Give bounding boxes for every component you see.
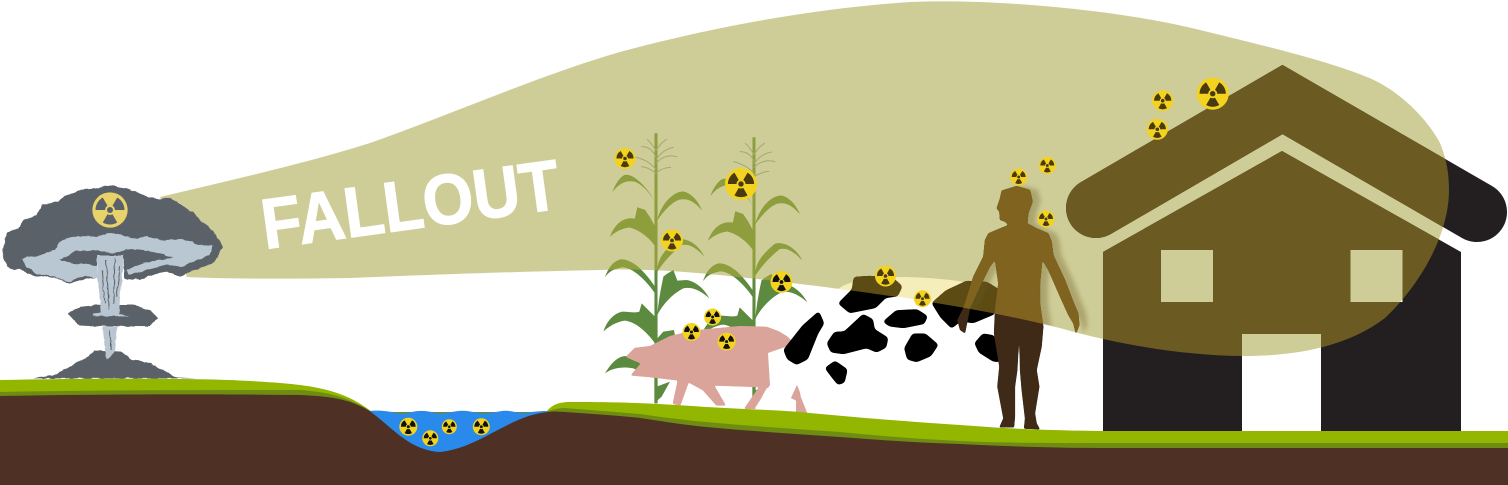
icon: radiation symbols in river <box>399 418 490 446</box>
corn upper portion inside plume <box>608 133 802 280</box>
corn lower portion <box>603 133 807 407</box>
icon: radiation symbol on cloud <box>92 192 128 228</box>
icon: radiation symbols on cow <box>875 266 931 307</box>
icon: radiation symbols on corn and pig <box>614 148 792 351</box>
house <box>1096 100 1477 431</box>
corn tassels <box>636 139 775 177</box>
grass shadow <box>0 390 1508 485</box>
house black base <box>1096 100 1477 431</box>
mushroom cloud <box>3 185 223 378</box>
house tinted by plume <box>1066 64 1449 356</box>
grass <box>0 379 1508 485</box>
soil <box>0 394 1508 485</box>
human silhouette <box>957 186 1079 429</box>
icon: radiation symbols on roof <box>1147 78 1229 140</box>
icon: radiation symbols on human <box>1010 157 1056 228</box>
fallout plume <box>160 1 1449 356</box>
human shadow <box>974 184 1089 332</box>
heading: FALLOUT: FALLOUT <box>256 146 564 265</box>
cow patches <box>785 277 999 383</box>
human tinted by plume <box>964 186 1080 332</box>
patches tinted by plume <box>850 276 998 314</box>
corn plants <box>603 133 807 407</box>
cow body <box>755 290 1000 428</box>
river <box>368 411 548 460</box>
human figure <box>957 186 1087 429</box>
black patches <box>785 277 999 383</box>
cloud shapes <box>3 185 223 378</box>
pig <box>627 327 807 413</box>
cow back highlight <box>838 277 990 310</box>
ground <box>0 379 1508 485</box>
